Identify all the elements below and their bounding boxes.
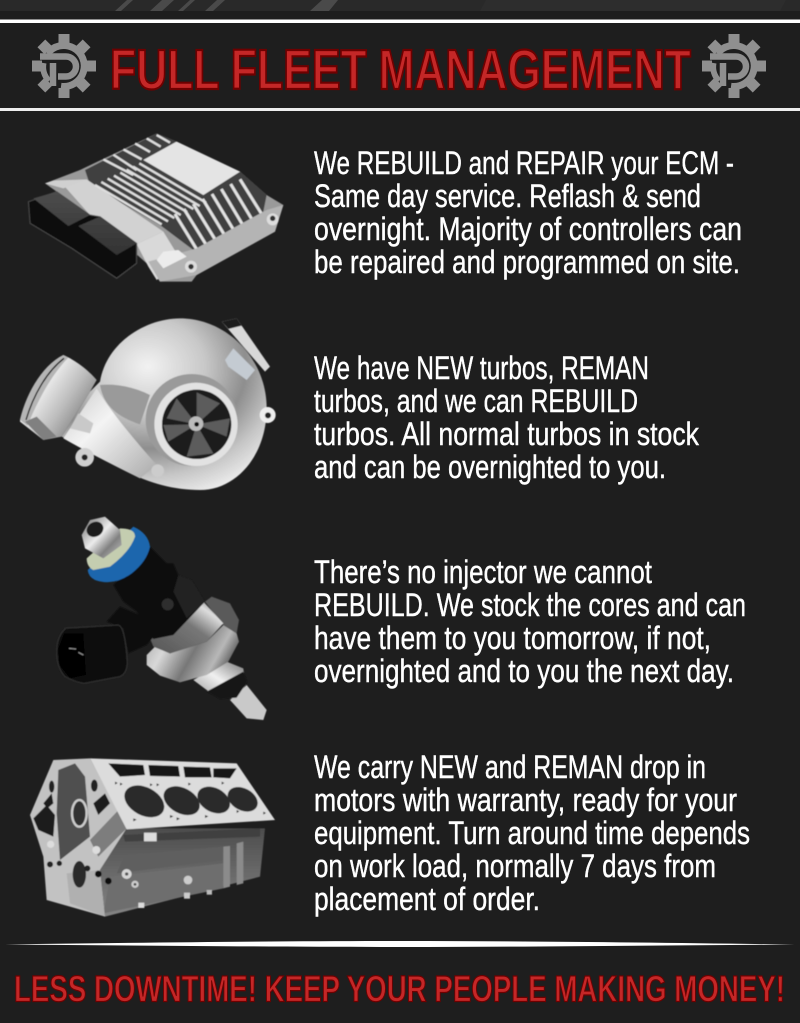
icon: gear logo right (702, 34, 766, 98)
text block: motors (314, 749, 750, 917)
text block: motors: placement of order. (314, 881, 540, 917)
text block: turbos: turbos. All normal turbos in stock (314, 416, 700, 452)
icon: gear logo left (32, 34, 96, 98)
icon: fuel injector (57, 517, 267, 720)
text block: motors: on work load, normally 7 days from (314, 848, 716, 884)
text block: injectors (314, 554, 746, 689)
text block: injectors: There’s no injector we cannot (314, 554, 652, 590)
right fins (175, 179, 262, 249)
text block: turbos (314, 350, 700, 485)
text block: ECM (314, 145, 742, 280)
icon: ECM controller (28, 133, 283, 282)
header rule top (0, 20, 800, 23)
text block: turbos: We have NEW turbos, REMAN (314, 350, 649, 386)
text block: turbos: turbos, and we can REBUILD (314, 383, 638, 419)
header rule bottom (0, 108, 800, 111)
top texture band (0, 0, 800, 11)
text block: ECM: Same day service. Reflash & send (314, 178, 701, 214)
text block: turbos: and can be overnighted to you. (314, 449, 666, 485)
icon: turbocharger (20, 318, 276, 490)
icon: engine block (30, 758, 275, 917)
text block: injectors: have them to you tomorrow, if not, (314, 620, 711, 656)
footer divider (5, 941, 795, 947)
long fins (95, 135, 206, 224)
